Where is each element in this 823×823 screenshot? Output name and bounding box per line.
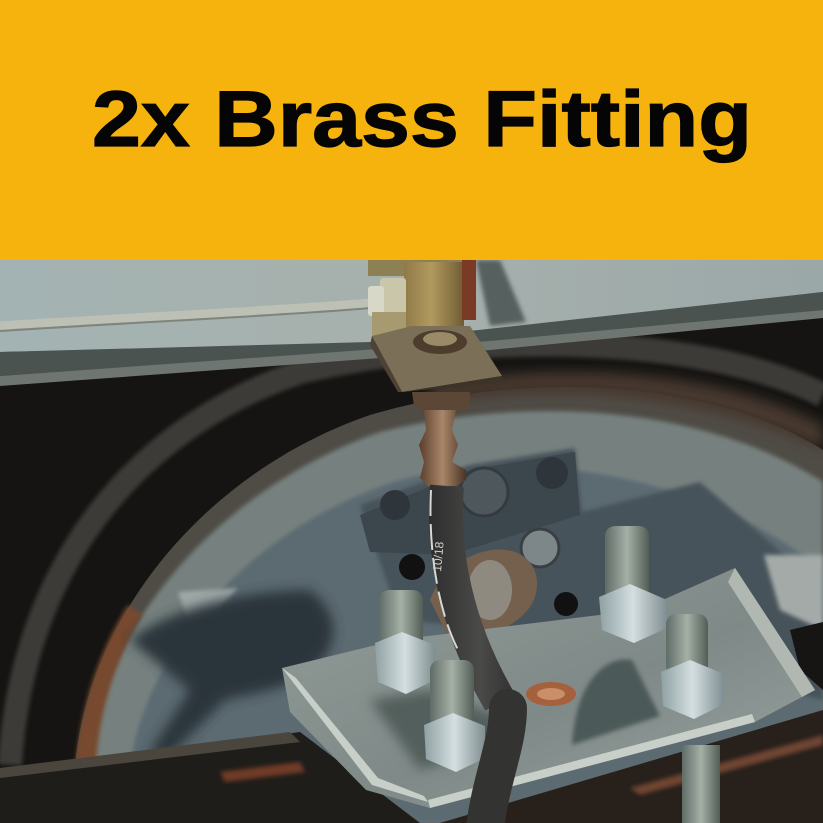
front hose section [484,708,508,823]
title: 2x Brass Fitting [92,74,752,163]
brass fitting block [368,260,476,338]
yellow title banner [0,0,823,260]
brake backing plate [178,448,823,700]
rusty mounting bracket [370,326,502,392]
brake drum [10,345,823,823]
black brake hose with print [430,486,500,702]
brake line tube [0,303,372,326]
galvanized U-bolt plate [282,568,815,808]
bolt 1 [375,590,435,694]
photo: trailer brake line and brass fitting [0,260,823,823]
hex bolts [375,526,724,772]
bolt 3 [661,614,724,719]
dark wheel well background [0,292,823,768]
shadow on drum [130,590,333,755]
bolt 4 [424,660,485,772]
bolt 2 [599,526,667,643]
copper hose crimp [412,392,470,486]
black brake hose with print: 10/18 [430,541,447,572]
galvanized beam [0,260,823,386]
leaf spring [0,622,823,823]
